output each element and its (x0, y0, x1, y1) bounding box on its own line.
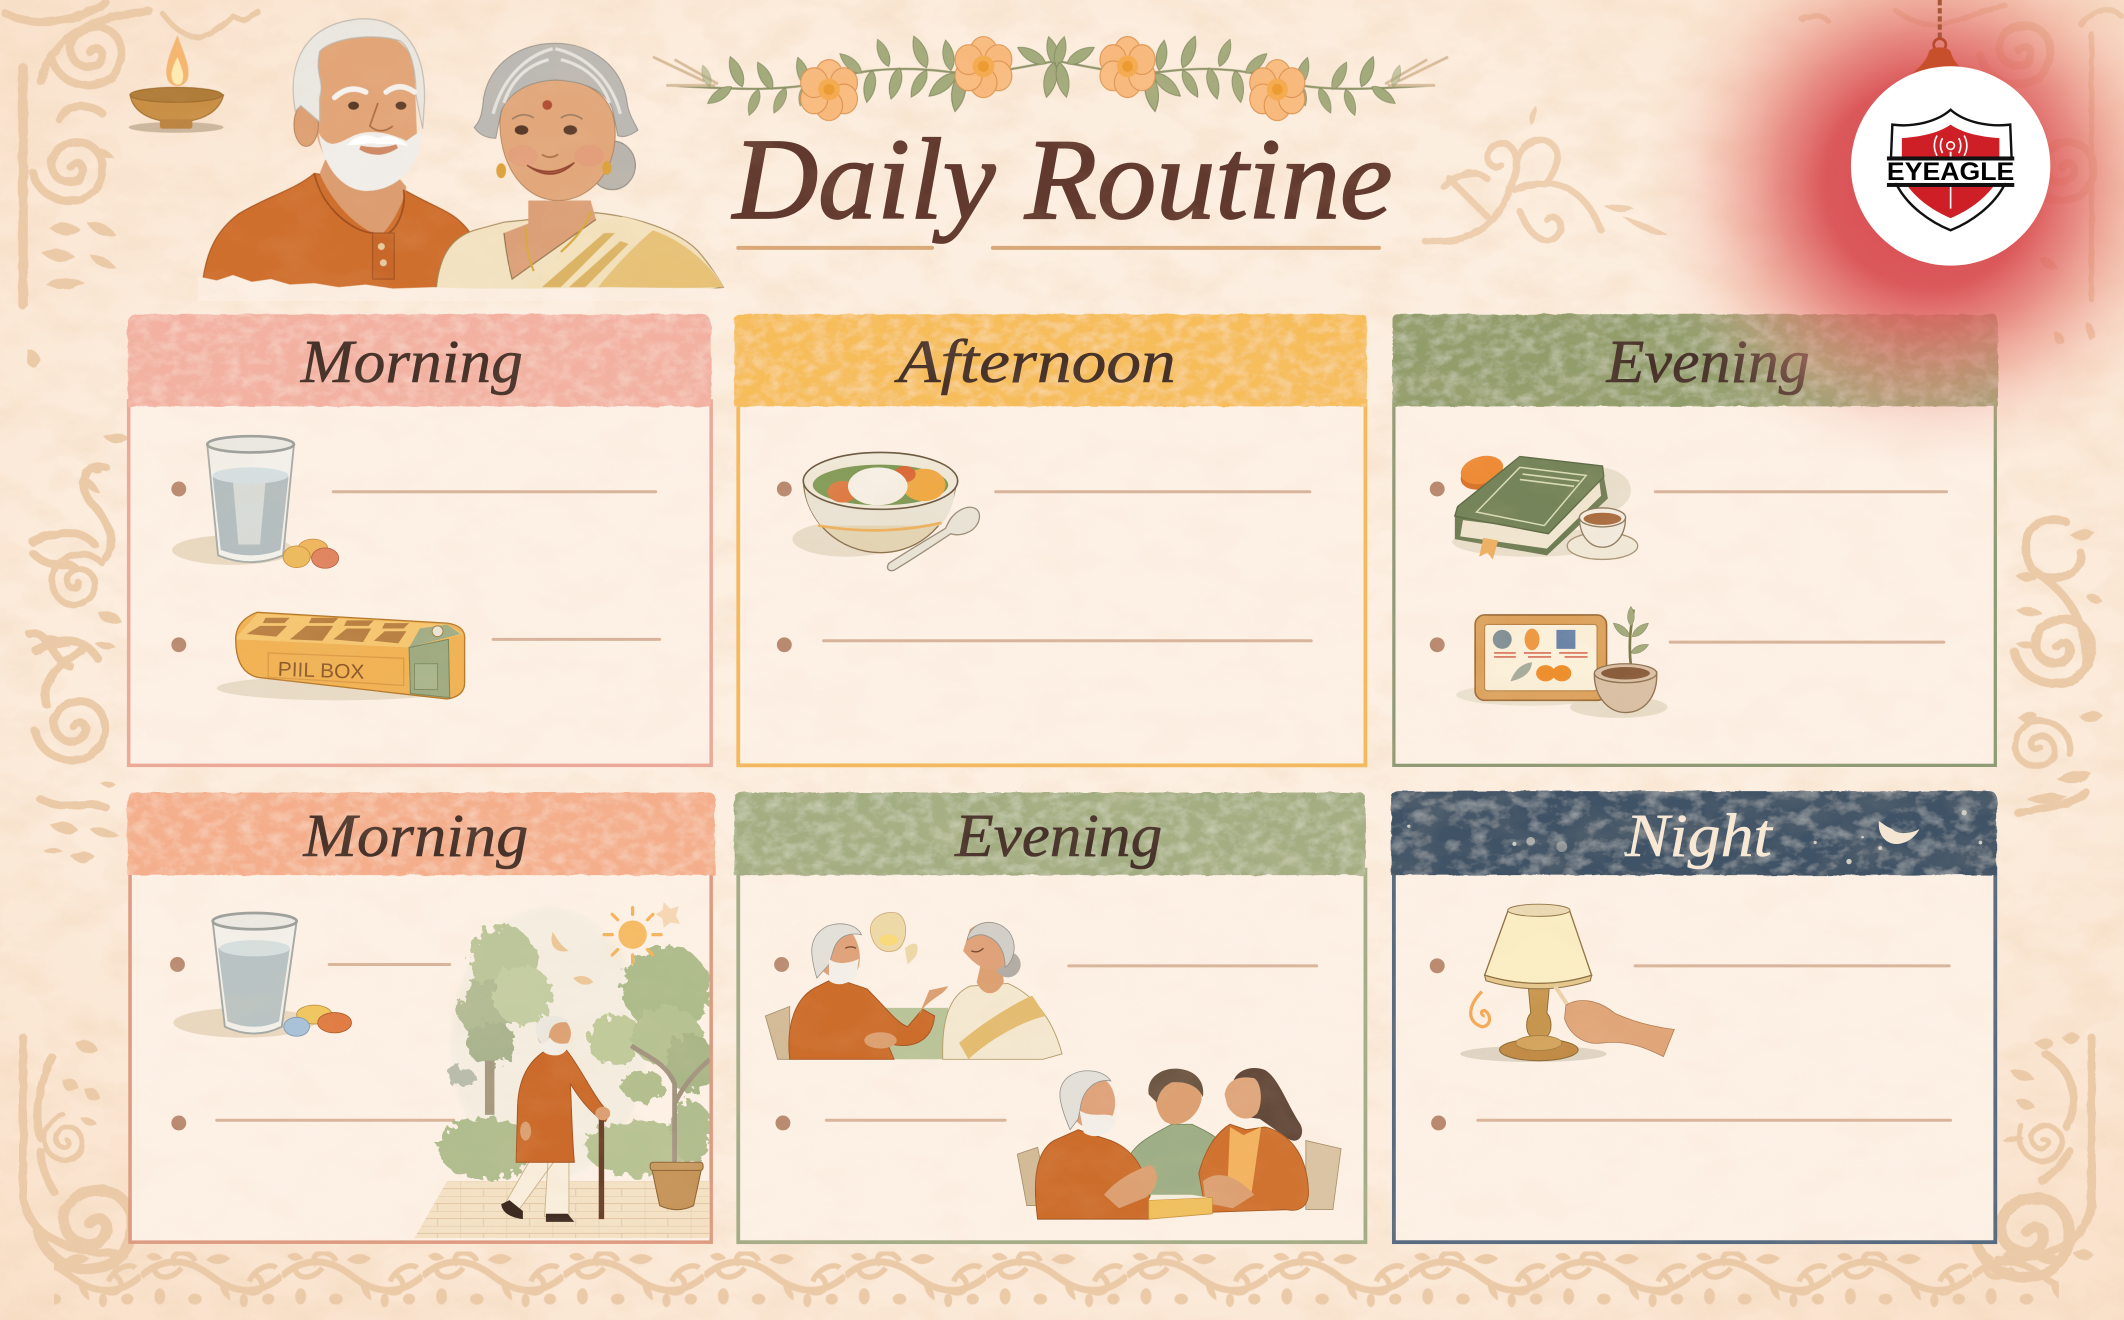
bullets and writing lines (1430, 482, 1947, 652)
sun (604, 902, 680, 963)
header (127, 314, 711, 406)
illustration: grandfather walking in garden (415, 902, 715, 1238)
stars and specks (1407, 810, 1982, 864)
heading: Afternoon (894, 329, 1176, 396)
bullets and writing lines (171, 482, 660, 652)
bullets and writing lines (774, 957, 1317, 1130)
panel: morning (top) (127, 314, 711, 765)
panel: afternoon (734, 314, 1367, 765)
ornament: scroll beside title (1425, 106, 1669, 242)
icon: table lamp with hand (1460, 904, 1674, 1062)
icon: water glass with pills (173, 913, 352, 1038)
red glow behind logo (1612, 0, 2124, 477)
ornament: bottom left corner (23, 1038, 163, 1269)
paved ground (415, 1181, 710, 1238)
right half of garland (1052, 34, 1448, 121)
icon: hanging bell (1910, 0, 1970, 76)
logo wordmark: EYEAGLE (1887, 158, 2014, 186)
falling leaves (552, 932, 593, 985)
left tree and bushes (439, 927, 713, 1180)
man in orange kurta (203, 19, 473, 290)
ornament: bottom right corner (1975, 1033, 2094, 1277)
ornament: left column scroll (30, 433, 130, 863)
flower pot (652, 1168, 702, 1210)
moon icon (1879, 821, 1919, 844)
heading: Morning (300, 329, 523, 396)
panel: morning (bottom) (127, 792, 715, 1242)
torn paper edge (198, 275, 726, 301)
heading: Evening (954, 803, 1162, 870)
logo badge: EYEAGLE (1851, 66, 2050, 266)
heading: Night (1624, 803, 1774, 870)
icon: tablet with plant pot (1456, 606, 1668, 718)
title: Daily Routine (731, 115, 1393, 243)
panel: evening (bottom) (734, 792, 1365, 1242)
heading: Morning (302, 803, 528, 870)
ornament: top left corner (5, 3, 257, 367)
header (1391, 791, 1997, 875)
walking man (501, 1016, 610, 1222)
icon: food bowl with spoon (792, 452, 979, 571)
bullets and writing lines (777, 482, 1311, 652)
heading: Evening (1606, 329, 1810, 396)
shield (1891, 110, 2012, 230)
bullets and writing lines (1430, 958, 1951, 1130)
right tree (587, 946, 715, 1103)
arch sky (451, 908, 646, 1178)
garland of marigolds and leaves (653, 34, 1448, 121)
panel: evening (top) (1393, 314, 1998, 765)
icon: book and tea cup (1452, 451, 1638, 559)
woman in cream saree (436, 43, 723, 290)
header (127, 792, 715, 875)
icon: water glass with pills (172, 436, 339, 568)
pill box label: PIIL BOX (277, 659, 365, 684)
bullets and writing lines (170, 957, 454, 1130)
illustration: elderly couple portrait (198, 19, 726, 301)
header (734, 314, 1367, 406)
ornament: right column scroll (2009, 520, 2102, 813)
ornament: top right corner (1802, 5, 2121, 344)
title underline (738, 246, 1379, 249)
icon: pill box (217, 612, 465, 700)
header (734, 792, 1365, 875)
ornament: bottom floral band (54, 1252, 2059, 1309)
icon: oil lamp diya (129, 35, 224, 133)
illustration: grandfather with family at table (1017, 1068, 1341, 1219)
left half of garland (653, 34, 1062, 121)
panel: night (1391, 791, 1997, 1242)
illustration: elderly couple talking (764, 912, 1062, 1070)
header (1393, 314, 1998, 406)
